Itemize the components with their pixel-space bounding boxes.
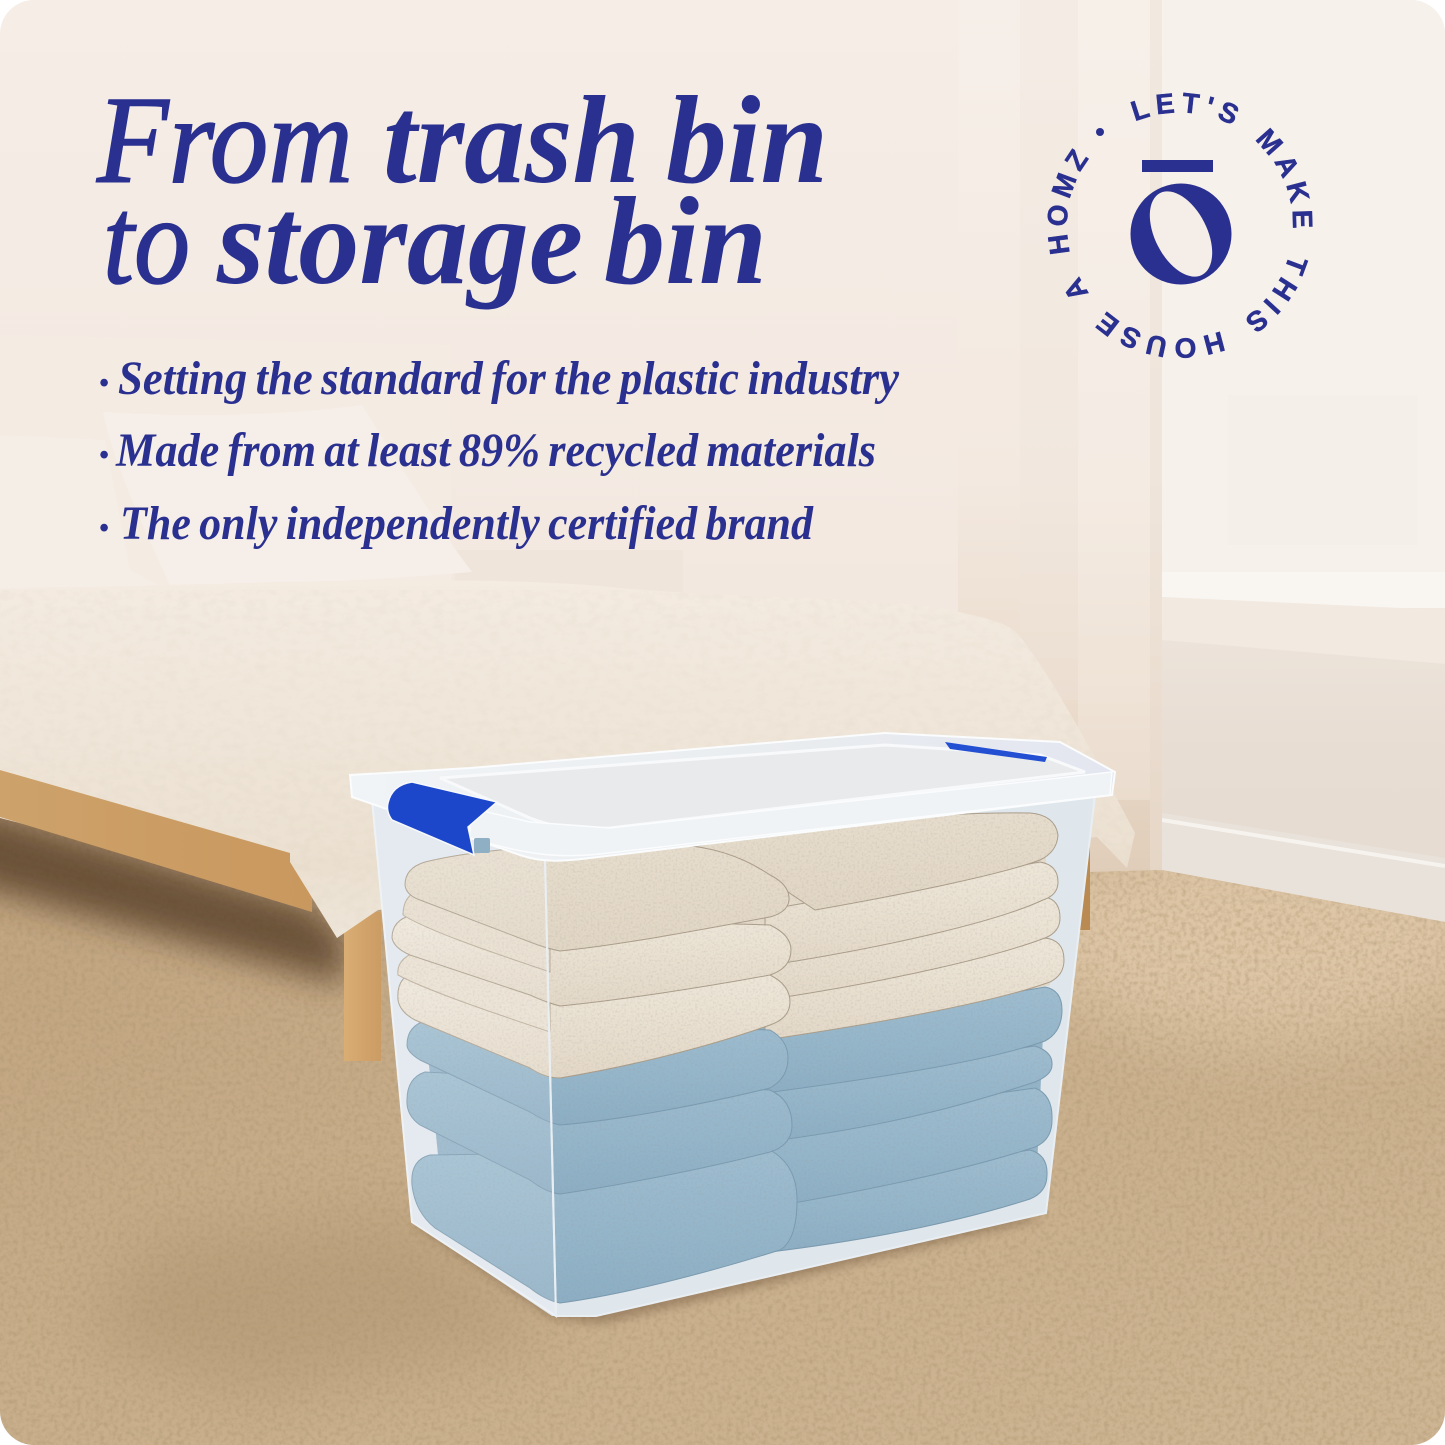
towels in bin — [392, 813, 1064, 1303]
icon: left blue latch — [388, 782, 497, 855]
title — [96, 72, 828, 311]
latch clip — [474, 838, 490, 853]
curtains — [958, 0, 1162, 872]
logo badge: LET'S MAKE THIS HOUSE A HOMZ — [1048, 92, 1313, 358]
title: storage — [216, 173, 583, 311]
bin left panel — [372, 800, 556, 1316]
title: to — [103, 173, 190, 311]
shadow under bin — [412, 1180, 1046, 1324]
lid inner recess — [440, 745, 1085, 829]
icon: right blue latch — [945, 742, 1047, 762]
bullet list: Setting the standard for the plastic industry — [118, 352, 900, 405]
clear plastic bin — [350, 733, 1115, 1316]
bullet list: • — [99, 513, 109, 544]
bullet list: The only independently certified brand — [120, 497, 814, 550]
bullet list: • — [99, 440, 109, 471]
bed frame and legs — [0, 770, 1090, 1061]
bin right panel — [545, 795, 1095, 1316]
shadow under bed — [0, 818, 344, 1000]
bin lid — [350, 733, 1115, 861]
bed duvet — [0, 580, 1140, 940]
background: bedroom wall — [0, 0, 1445, 900]
left stack of towels — [392, 844, 797, 1303]
nightstand — [455, 550, 683, 592]
bullet list: • — [99, 368, 109, 399]
window and right wall — [1160, 0, 1445, 922]
pillows — [0, 405, 472, 590]
title: From — [96, 72, 353, 210]
bullet list — [99, 352, 900, 550]
carpet — [0, 780, 1445, 1445]
headboard — [0, 335, 452, 590]
towel fillers — [415, 825, 1050, 1295]
title: bin — [666, 72, 828, 210]
title: trash — [383, 72, 640, 210]
lid front rim — [470, 772, 1112, 856]
title: bin — [604, 173, 767, 311]
right stack of towels — [690, 813, 1064, 1252]
frosted bin body — [372, 795, 1095, 1316]
bullet list: Made from at least 89% recycled materials — [115, 424, 876, 477]
